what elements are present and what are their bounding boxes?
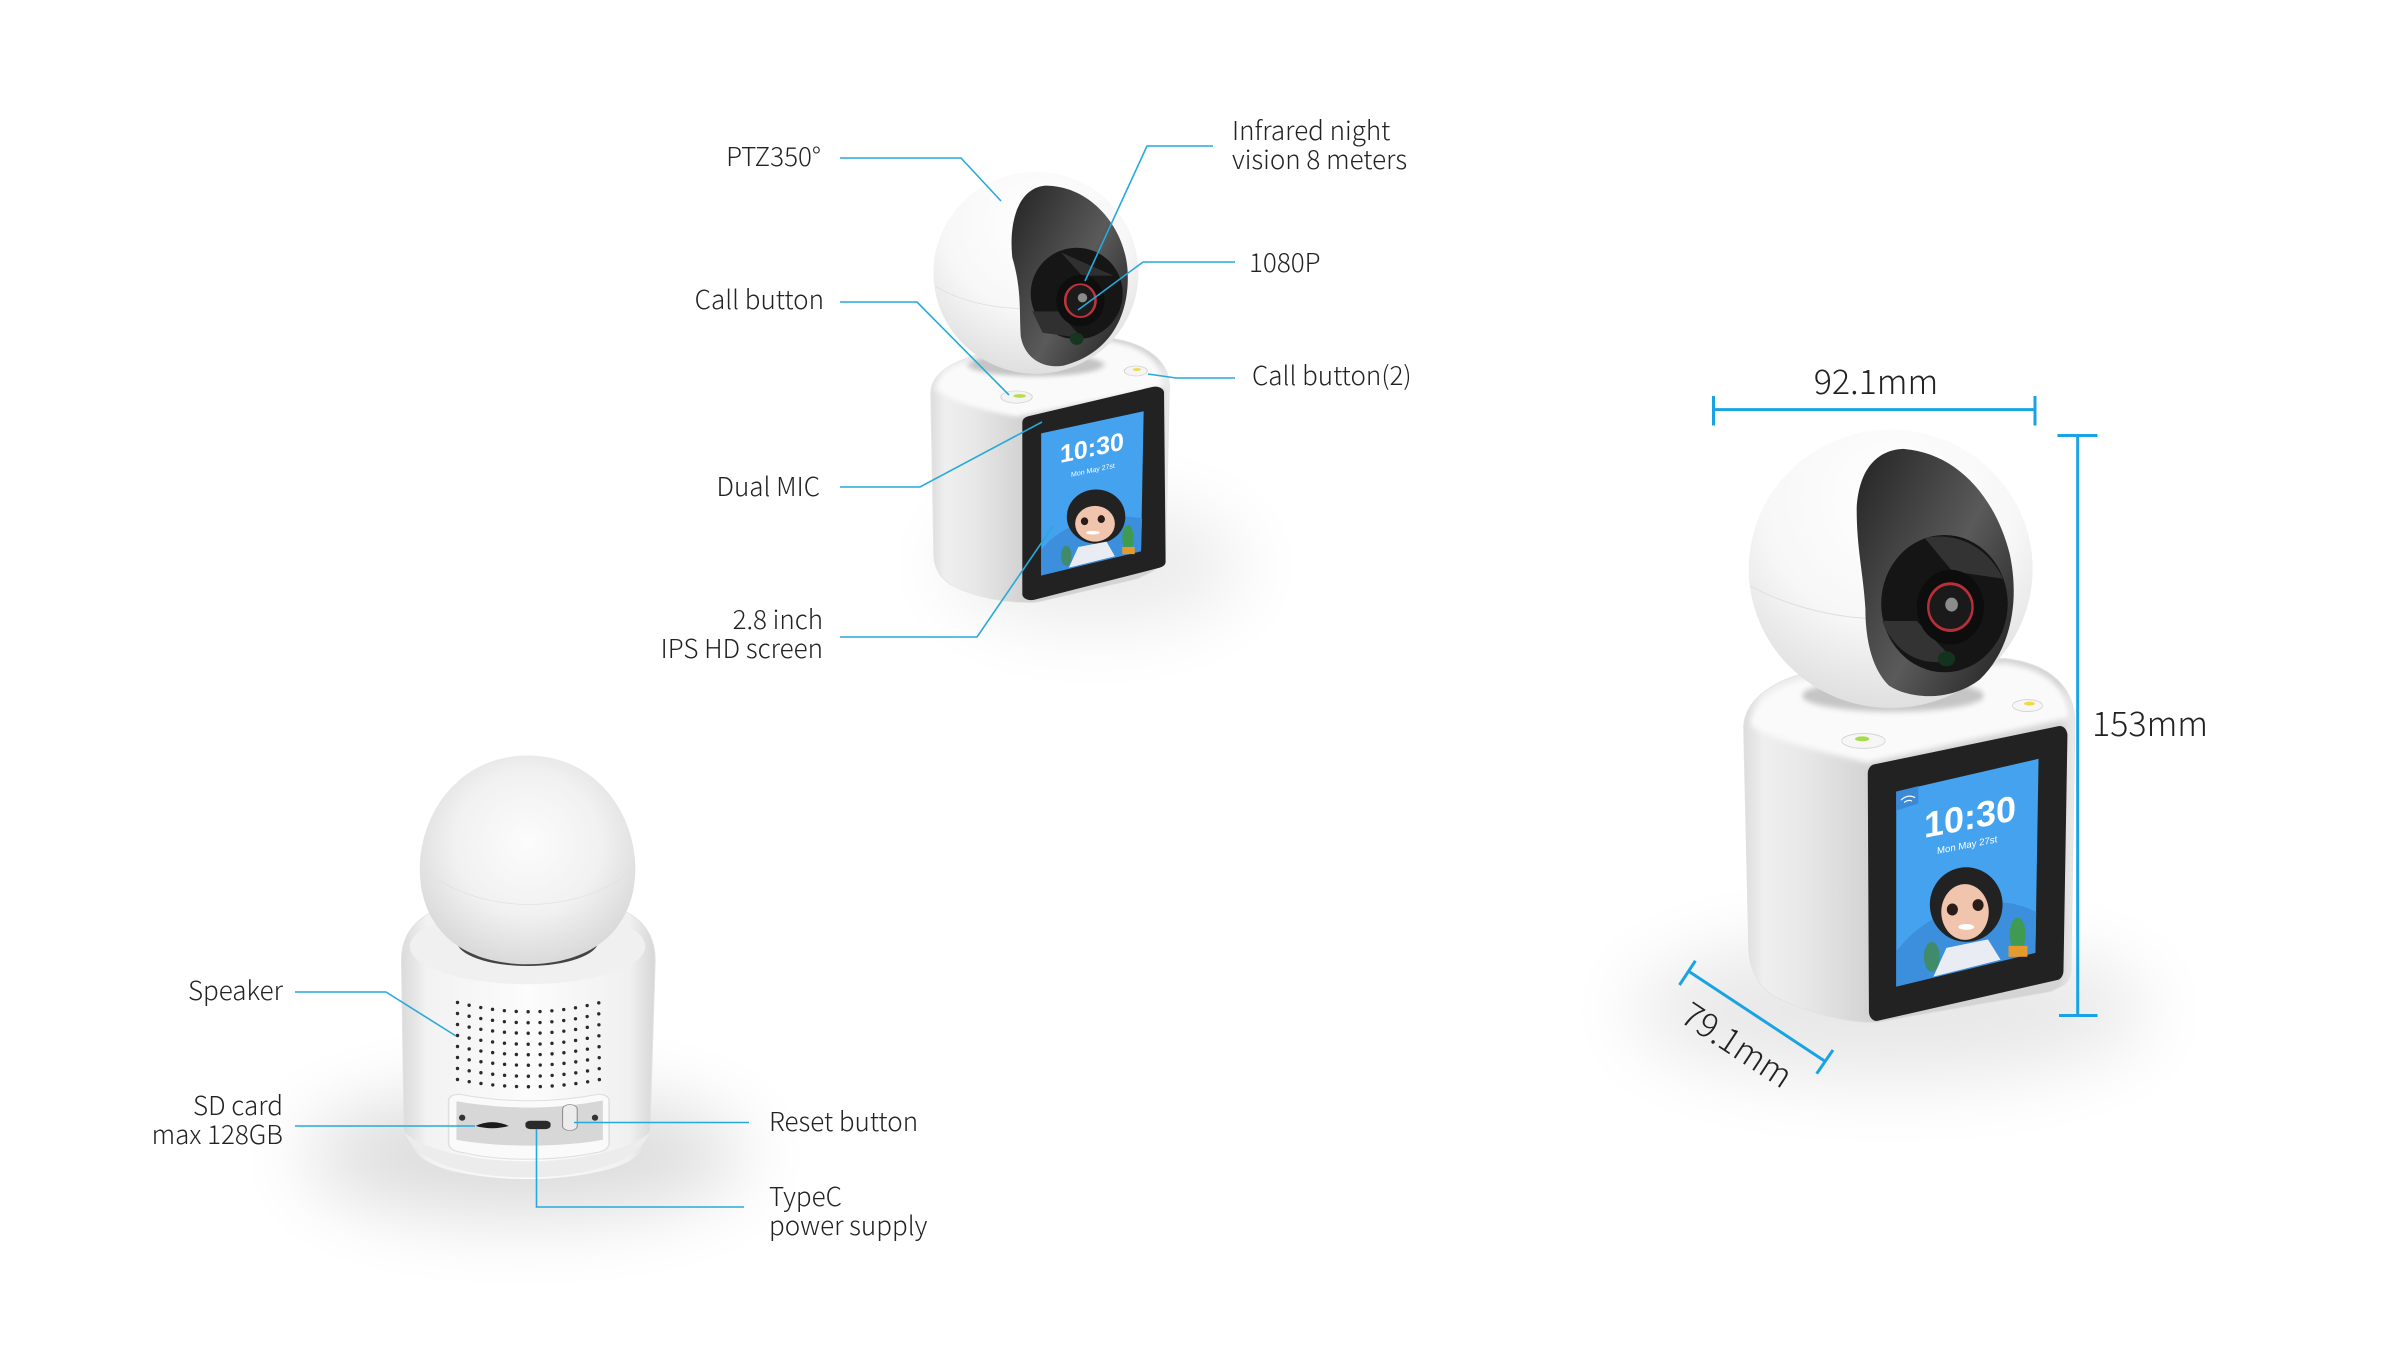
head (933, 172, 1138, 374)
call button left (1842, 733, 1885, 748)
width dimension: 92.1mm (1814, 355, 1938, 404)
clock time: 10:30 (1924, 787, 2016, 846)
rear base (402, 902, 655, 1179)
head contact shadow (1802, 680, 1984, 712)
port panel (449, 1094, 609, 1159)
label: infrared night vision: Infrared night (1232, 111, 1390, 148)
label: screen size: 2.8 inch (733, 600, 823, 637)
label: infrared night vision (1085, 111, 1407, 281)
clock time: 10:30 (1060, 428, 1124, 469)
label: call button: Call button (695, 280, 824, 317)
lens (1056, 275, 1104, 326)
infrared sensor (1070, 333, 1084, 345)
character avatar (1924, 867, 2027, 977)
camera dimension view (1630, 430, 2150, 1080)
camera base (931, 338, 1169, 603)
call button right (2012, 700, 2043, 712)
label: PTZ350: PTZ350° (726, 137, 821, 174)
dark camera face (1012, 186, 1128, 366)
depth dimension: 79.1mm (1673, 988, 1804, 1098)
label: TypeC power supply (536, 1129, 928, 1243)
housing wedges (1882, 536, 2003, 662)
head seam (1751, 586, 1867, 619)
dimension head (1749, 430, 2033, 708)
camera rear view (305, 755, 745, 1215)
label: screen size (661, 526, 1053, 666)
label: PTZ350 (726, 137, 1001, 201)
lens (1917, 570, 1984, 644)
call button left (1001, 391, 1032, 403)
head seam (421, 868, 634, 904)
label: TypeC power supply: power supply (769, 1206, 928, 1243)
screen hill (1896, 902, 2036, 987)
label: TypeC power supply: TypeC (769, 1177, 842, 1214)
head contact shadow (968, 353, 1104, 376)
dark neck ring (457, 916, 598, 966)
screen hill (1041, 517, 1142, 576)
label: reset button: Reset button (769, 1102, 918, 1139)
dimension base (1744, 658, 2075, 1023)
label: screen size: IPS HD screen (661, 629, 823, 666)
width dimension (1714, 355, 2035, 426)
label: speaker: Speaker (188, 971, 284, 1008)
rear head (420, 755, 635, 964)
label: SD card: SD card (193, 1086, 283, 1123)
screen bezel (1875, 735, 2060, 1011)
label: call button 2 (1148, 356, 1412, 393)
depth dimension (1673, 961, 1833, 1098)
label: dual MIC: Dual MIC (716, 467, 820, 504)
clock date: Mon May 27st (1937, 834, 1998, 857)
label: SD card: max 128GB (152, 1115, 283, 1152)
label: dual MIC (716, 422, 1042, 504)
label: 1080P: 1080P (1249, 243, 1321, 280)
clock date: Mon May 27st (1071, 463, 1115, 479)
speaker grille (458, 1002, 600, 1087)
character avatar (1061, 489, 1135, 568)
label: 1080P (1078, 243, 1321, 310)
label: call button 2: Call button(2) (1252, 356, 1412, 393)
base top surface (1751, 663, 2069, 763)
label: call button (695, 280, 1009, 395)
housing wedges (1032, 252, 1113, 338)
height dimension: 153mm (2092, 697, 2208, 746)
screen (1896, 759, 2039, 987)
label: speaker (188, 971, 456, 1036)
infrared sensor (1938, 651, 1955, 666)
dark camera face (1857, 449, 2014, 696)
base collar (410, 909, 645, 984)
call button right (1124, 366, 1147, 376)
lens housing (1881, 535, 2008, 672)
camera front view with callouts target (931, 172, 1245, 625)
screen (1041, 411, 1144, 576)
wifi badge (1896, 786, 1918, 811)
label: infrared night vision: vision 8 meters (1232, 140, 1407, 177)
screen bezel (1031, 393, 1157, 594)
base foot shading (405, 1132, 650, 1178)
height dimension (2058, 436, 2208, 1016)
head seam (935, 286, 1019, 308)
label: SD card (152, 1086, 475, 1152)
base top surface (936, 342, 1164, 417)
lens housing (1031, 248, 1123, 339)
